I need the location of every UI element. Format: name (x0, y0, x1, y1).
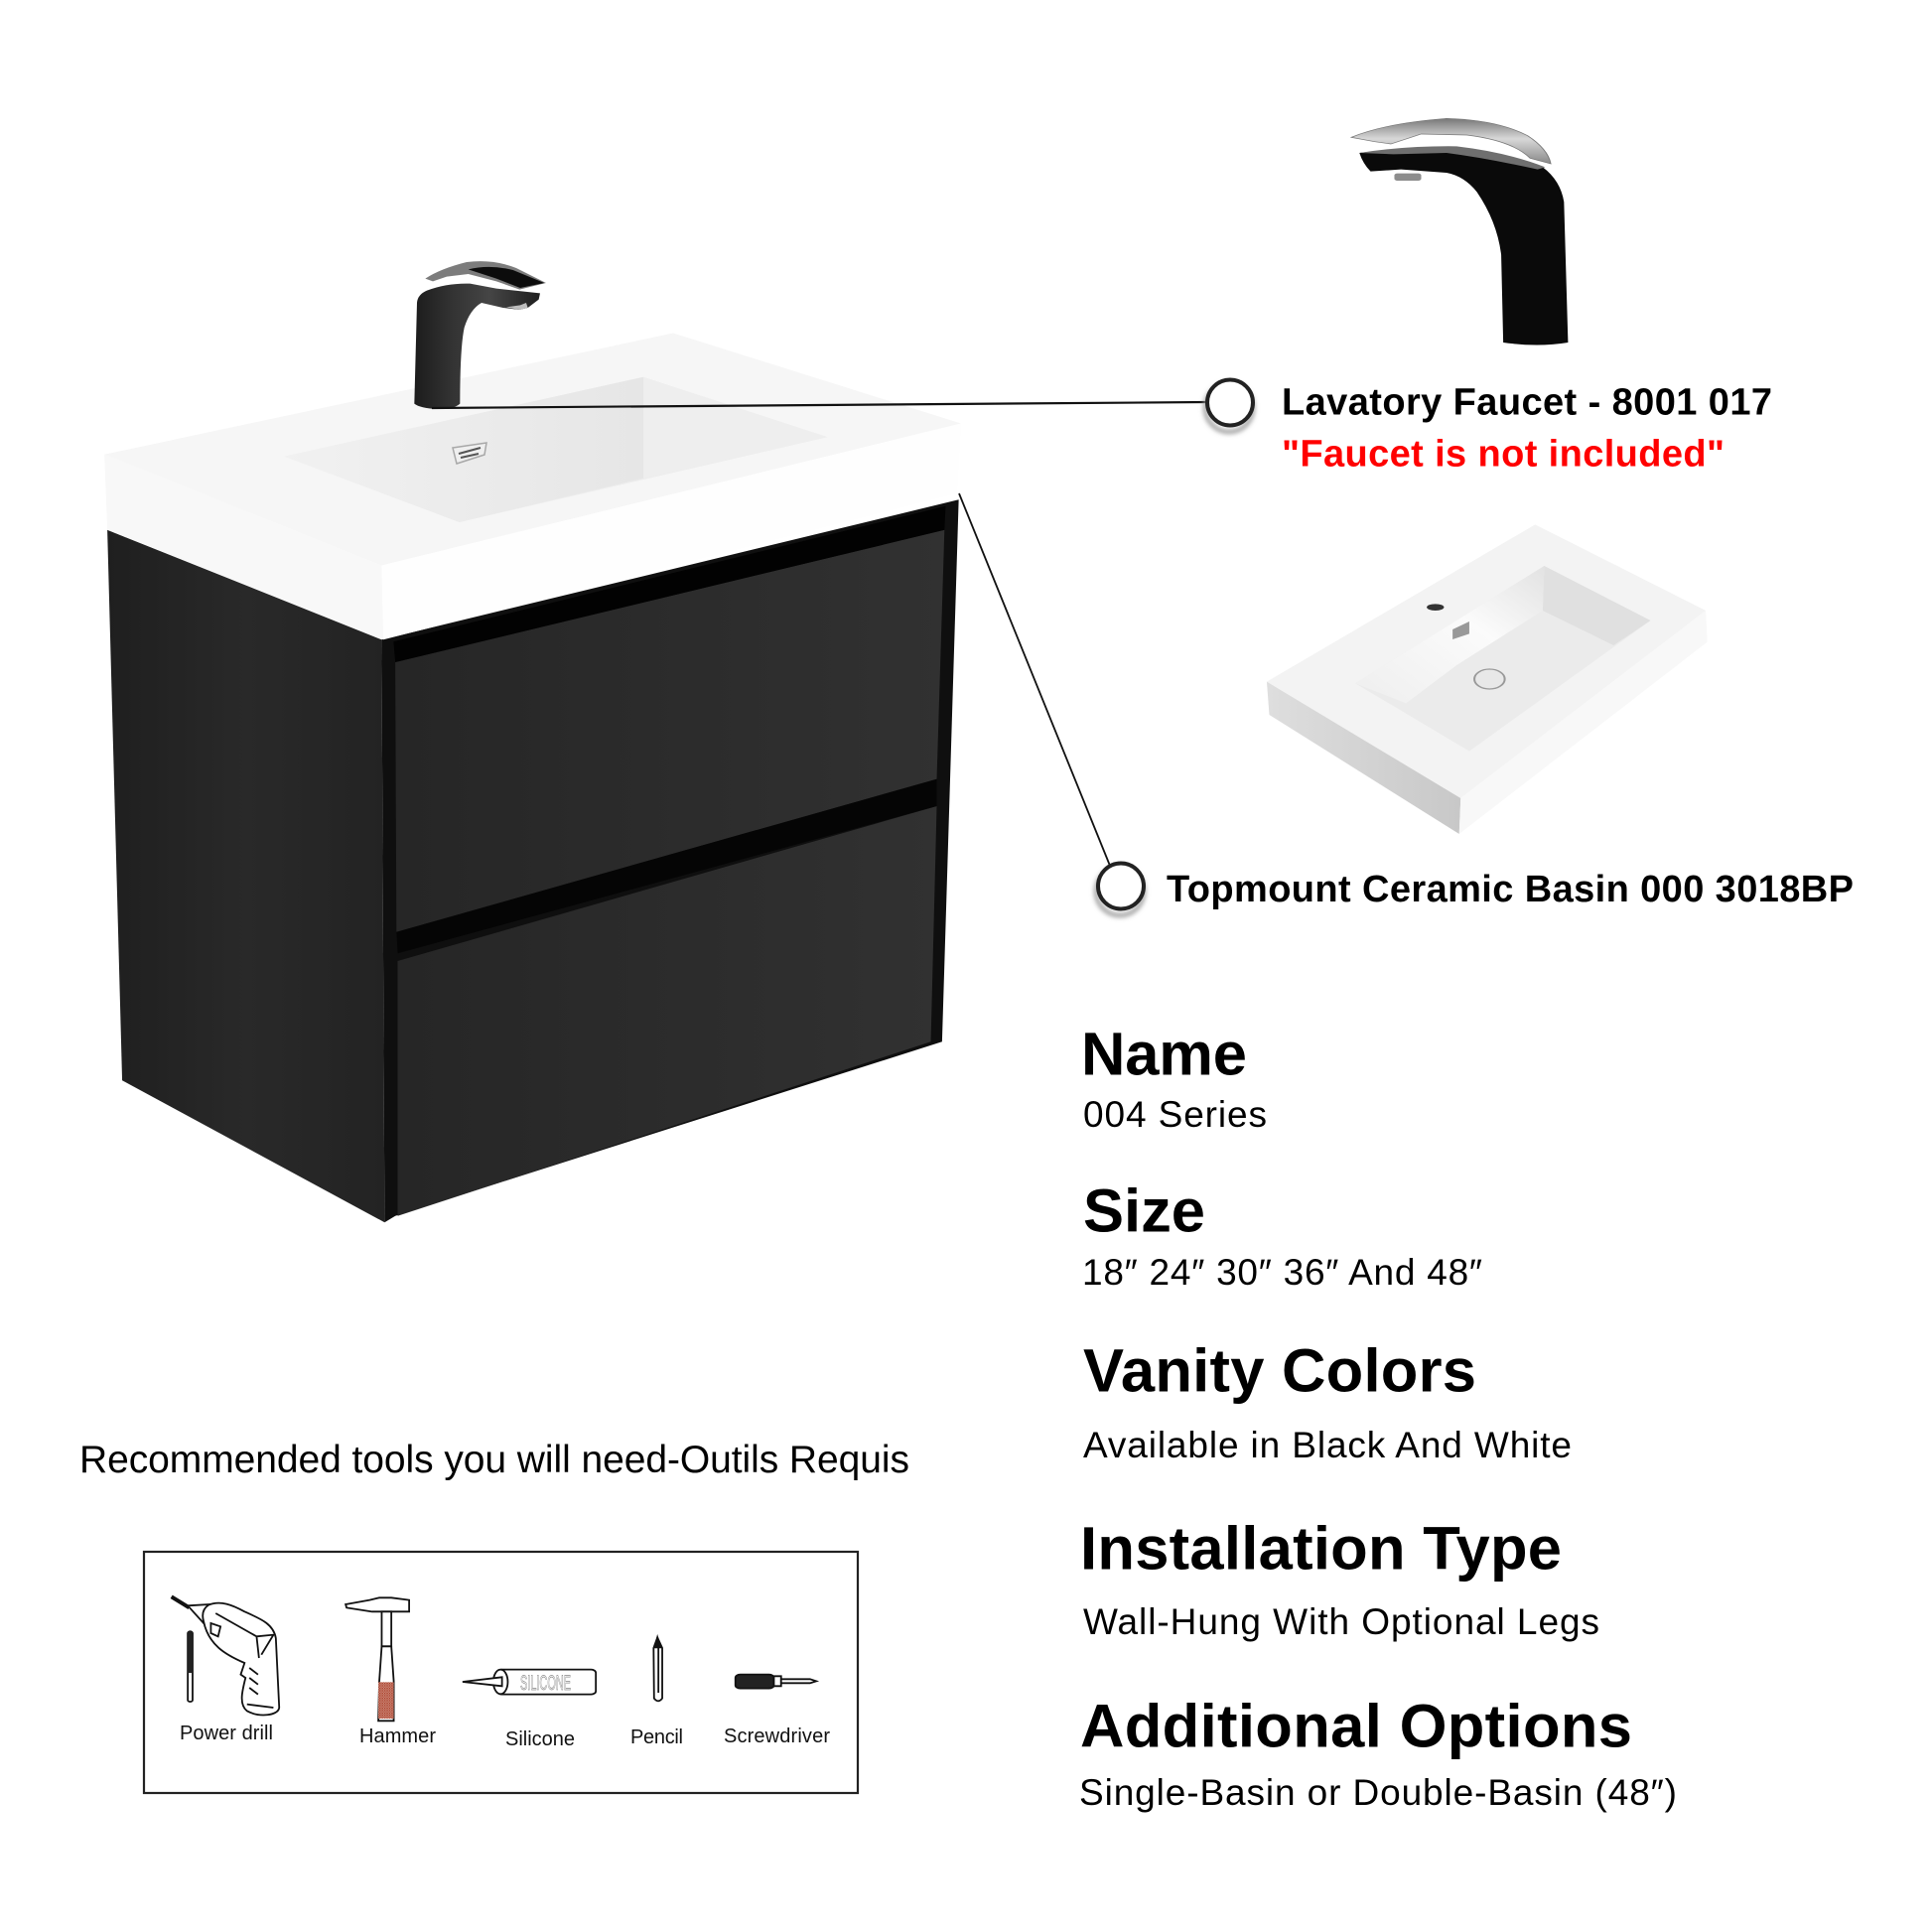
value: Available in Black And White (1083, 1425, 1572, 1465)
basin bowl (1355, 566, 1651, 752)
value: 18″ 24″ 30″ 36″ And 48″ (1082, 1252, 1482, 1293)
aerator (1394, 174, 1422, 181)
basin back wall (643, 377, 827, 479)
tool label: screwdriver: Screwdriver (724, 1725, 830, 1747)
tool label: power drill: Power drill (180, 1723, 273, 1744)
faucet label: Lavatory Faucet - 8001 017 (1282, 381, 1772, 423)
basin product photo (1267, 524, 1708, 834)
chrome handle (1351, 118, 1551, 164)
marker ring (1096, 864, 1144, 915)
basin left wall (284, 377, 643, 522)
silicone tube lettering: SILICONE (520, 1672, 571, 1695)
basin overflow drain (453, 443, 486, 464)
top drawer recess (393, 506, 945, 662)
bowl back wall (1543, 566, 1651, 645)
icon: hammer (345, 1597, 409, 1721)
spec: size (1082, 1177, 1482, 1293)
faucet note: "Faucet is not included" (1282, 433, 1725, 475)
callout: Lavatory faucet (1205, 379, 1772, 475)
spec: name (1081, 1021, 1267, 1135)
countertop top surface (104, 334, 961, 566)
drain (1474, 669, 1505, 689)
lower drawer (398, 806, 937, 1216)
vanity cabinet with basin top (104, 334, 961, 1222)
faucet body (414, 284, 540, 409)
bowl left wall (1355, 566, 1544, 703)
icon: power drill (172, 1596, 279, 1715)
icon: silicone tube (463, 1670, 596, 1695)
spec: vanity colors (1083, 1336, 1572, 1465)
tool drawings (172, 1596, 816, 1721)
chrome plate (1359, 146, 1545, 170)
installed faucet (414, 261, 546, 409)
basin left side (1267, 682, 1460, 834)
tool label: hammer: Hammer (359, 1725, 436, 1747)
heading: Vanity Colors (1083, 1336, 1476, 1406)
basin label: Topmount Ceramic Basin 000 3018BP (1167, 869, 1854, 910)
faucet aerator (502, 303, 528, 310)
tools heading: Recommended tools you will need-Outils Requis (79, 1439, 909, 1481)
heading: Installation Type (1080, 1515, 1562, 1583)
basin right side (1459, 611, 1708, 834)
middle drawer recess (396, 779, 937, 953)
faucet handle (425, 261, 546, 290)
heading: Name (1081, 1021, 1247, 1088)
countertop left face (104, 455, 383, 639)
cabinet front frame (381, 499, 959, 1222)
marker ring (1205, 379, 1253, 432)
icon: pencil (653, 1637, 662, 1701)
heading: Additional Options (1080, 1692, 1632, 1761)
cabinet side panel (107, 530, 384, 1222)
callout: Topmount basin (1096, 864, 1854, 915)
spout and body (1359, 149, 1568, 345)
spec: installation type (1080, 1515, 1599, 1642)
basin recess (284, 377, 827, 522)
tool label: silicone: Silicone (505, 1728, 575, 1750)
panel border (144, 1552, 858, 1793)
icon: screwdriver (736, 1675, 816, 1689)
value: Wall-Hung With Optional Legs (1083, 1601, 1599, 1642)
large faucet photo (1351, 118, 1568, 345)
basin top surface (1267, 524, 1706, 798)
upper drawer (395, 530, 944, 932)
faucet hole (1427, 604, 1444, 611)
heading: Size (1083, 1177, 1205, 1245)
leader line: faucet (432, 402, 1207, 408)
countertop right face (381, 424, 961, 639)
overflow (1452, 621, 1469, 639)
handle reflection (469, 267, 544, 288)
tool label: pencil: Pencil (630, 1726, 683, 1748)
tools panel (144, 1552, 858, 1793)
leader line: basin (959, 493, 1110, 866)
value: 004 Series (1083, 1094, 1267, 1135)
value: Single-Basin or Double-Basin (48″) (1079, 1772, 1677, 1813)
spec: additional options (1079, 1692, 1677, 1813)
